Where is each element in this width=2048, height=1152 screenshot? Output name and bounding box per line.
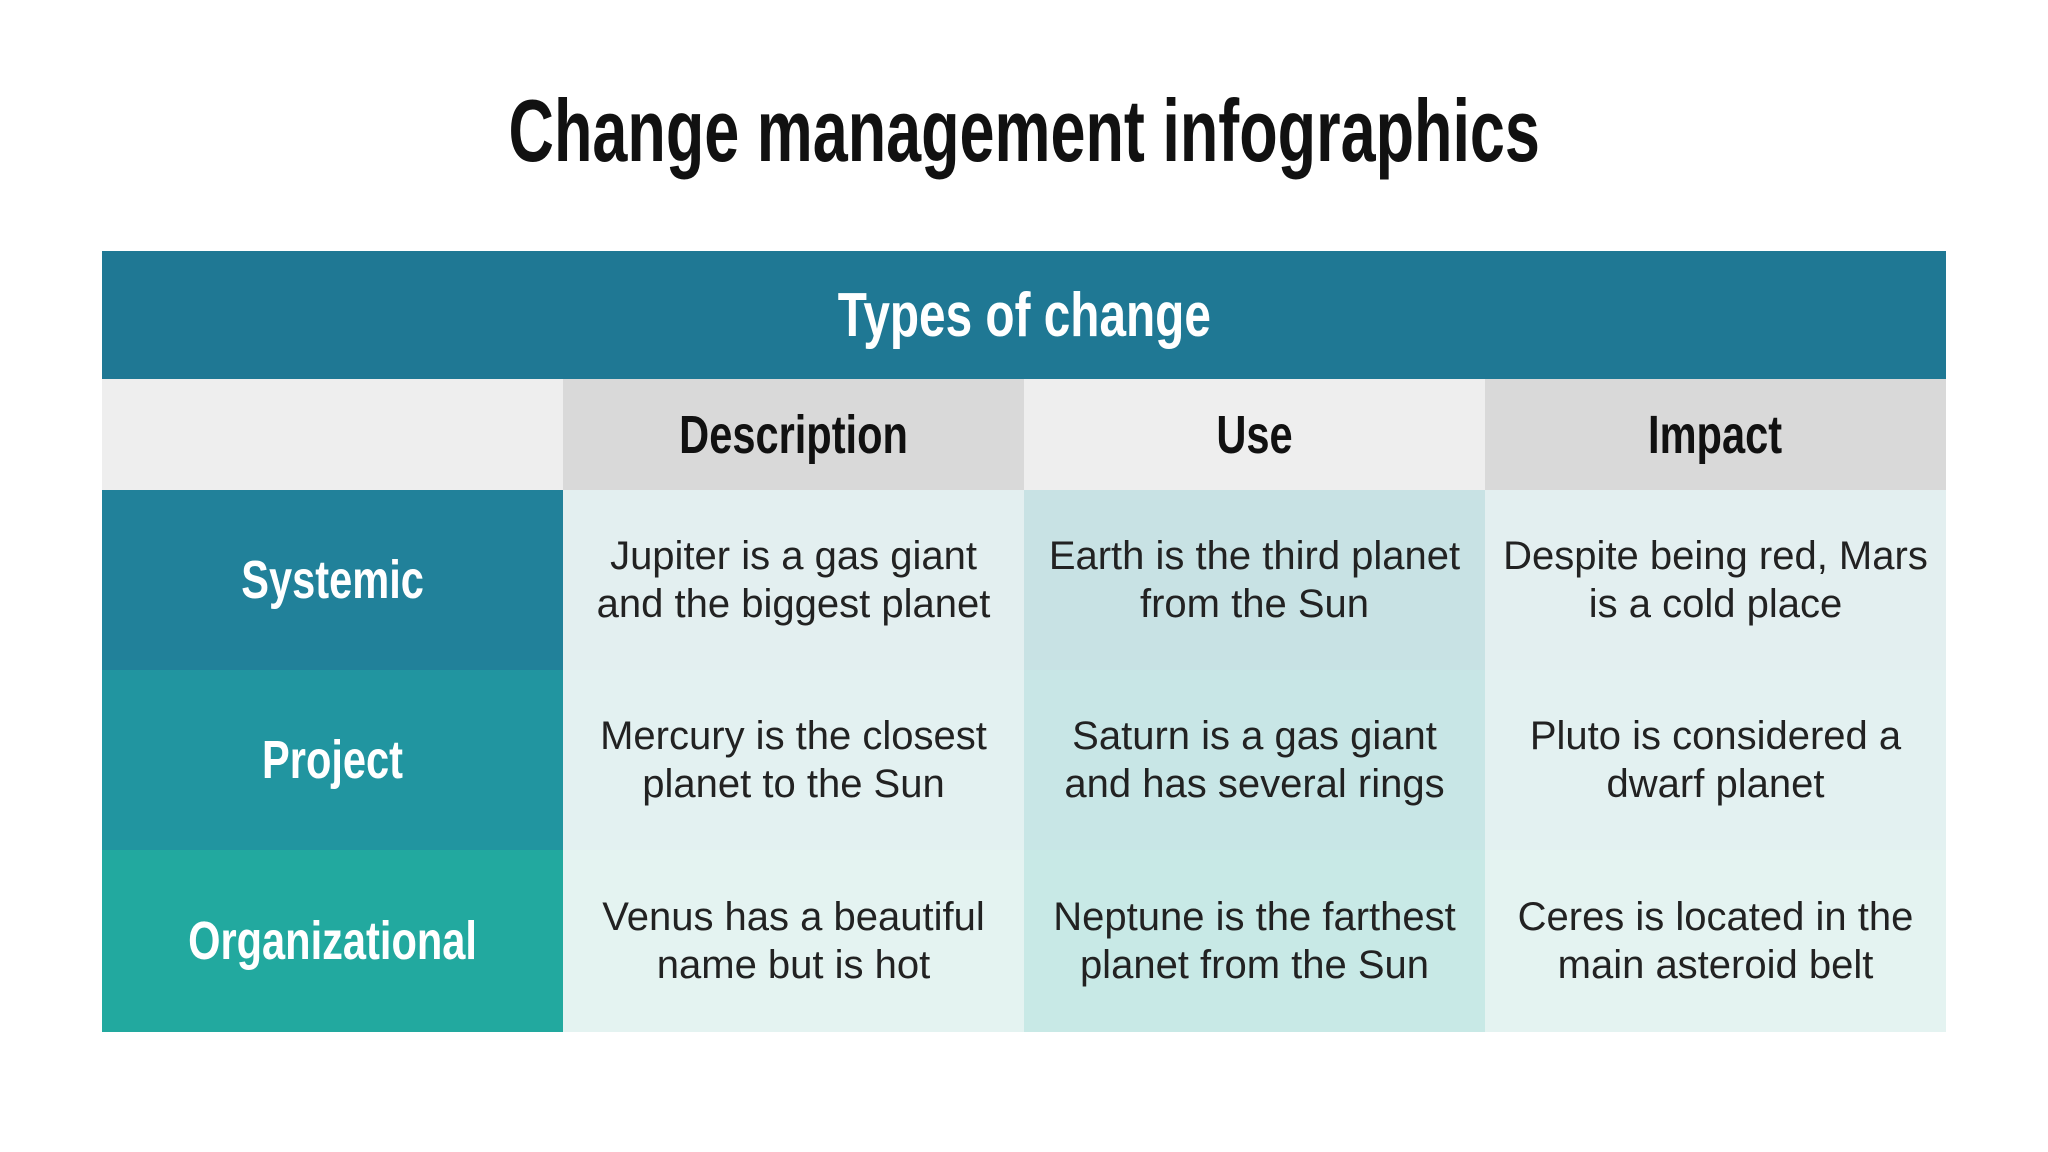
cell: Organizational description: Venus has a beautiful	[602, 895, 985, 939]
row label: Systemic: Systemic	[241, 550, 424, 610]
cell: Project impact: Pluto is considered a	[1530, 714, 1901, 758]
cell: Systemic use: Earth is the third planet	[1049, 534, 1460, 578]
column header: Description	[563, 379, 1024, 490]
cell: Organizational description: name but is hot	[657, 943, 930, 987]
column header: Use	[1024, 379, 1485, 490]
cell: Systemic impact	[1485, 490, 1946, 670]
cell: Project impact	[1485, 670, 1946, 850]
row label: Organizational	[102, 850, 563, 1032]
cell: Systemic description: Jupiter is a gas giant	[610, 534, 977, 578]
cell: Organizational description	[563, 850, 1024, 1032]
row label: Project	[102, 670, 563, 850]
title: Change management infographics	[508, 81, 1540, 180]
cell: Organizational use	[1024, 850, 1485, 1032]
table header: Types of change: Types of change	[837, 280, 1211, 350]
row label: Organizational: Organizational	[188, 911, 477, 971]
column header: Impact: Impact	[1648, 404, 1783, 464]
cell: Project use: Saturn is a gas giant	[1072, 714, 1437, 758]
cell: Systemic use	[1024, 490, 1485, 670]
column header: Use: Use	[1216, 404, 1293, 464]
table header: Types of change	[102, 251, 1946, 379]
cell: Organizational impact: Ceres is located in the	[1518, 895, 1913, 939]
row label: Project: Project	[262, 730, 403, 790]
column header: Description: Description	[679, 404, 908, 464]
cell: Systemic description: and the biggest planet	[597, 582, 990, 626]
row label: Systemic	[102, 490, 563, 670]
cell: Systemic use: from the Sun	[1140, 582, 1369, 626]
cell: Project impact: dwarf planet	[1607, 762, 1824, 806]
cell: Project use	[1024, 670, 1485, 850]
cell: Project description: Mercury is the closest	[600, 714, 987, 758]
column header: Impact	[1485, 379, 1946, 490]
cell: Project description: planet to the Sun	[642, 762, 945, 806]
cell: Organizational use: planet from the Sun	[1080, 943, 1429, 987]
blank corner cell	[102, 379, 563, 490]
cell: Project description	[563, 670, 1024, 850]
cell: Systemic impact: is a cold place	[1589, 582, 1842, 626]
cell: Project use: and has several rings	[1064, 762, 1445, 806]
cell: Systemic impact: Despite being red, Mars	[1503, 534, 1928, 578]
cell: Organizational impact	[1485, 850, 1946, 1032]
cell: Systemic description	[563, 490, 1024, 670]
cell: Organizational use: Neptune is the farthest	[1053, 895, 1456, 939]
cell: Organizational impact: main asteroid belt	[1558, 943, 1873, 987]
